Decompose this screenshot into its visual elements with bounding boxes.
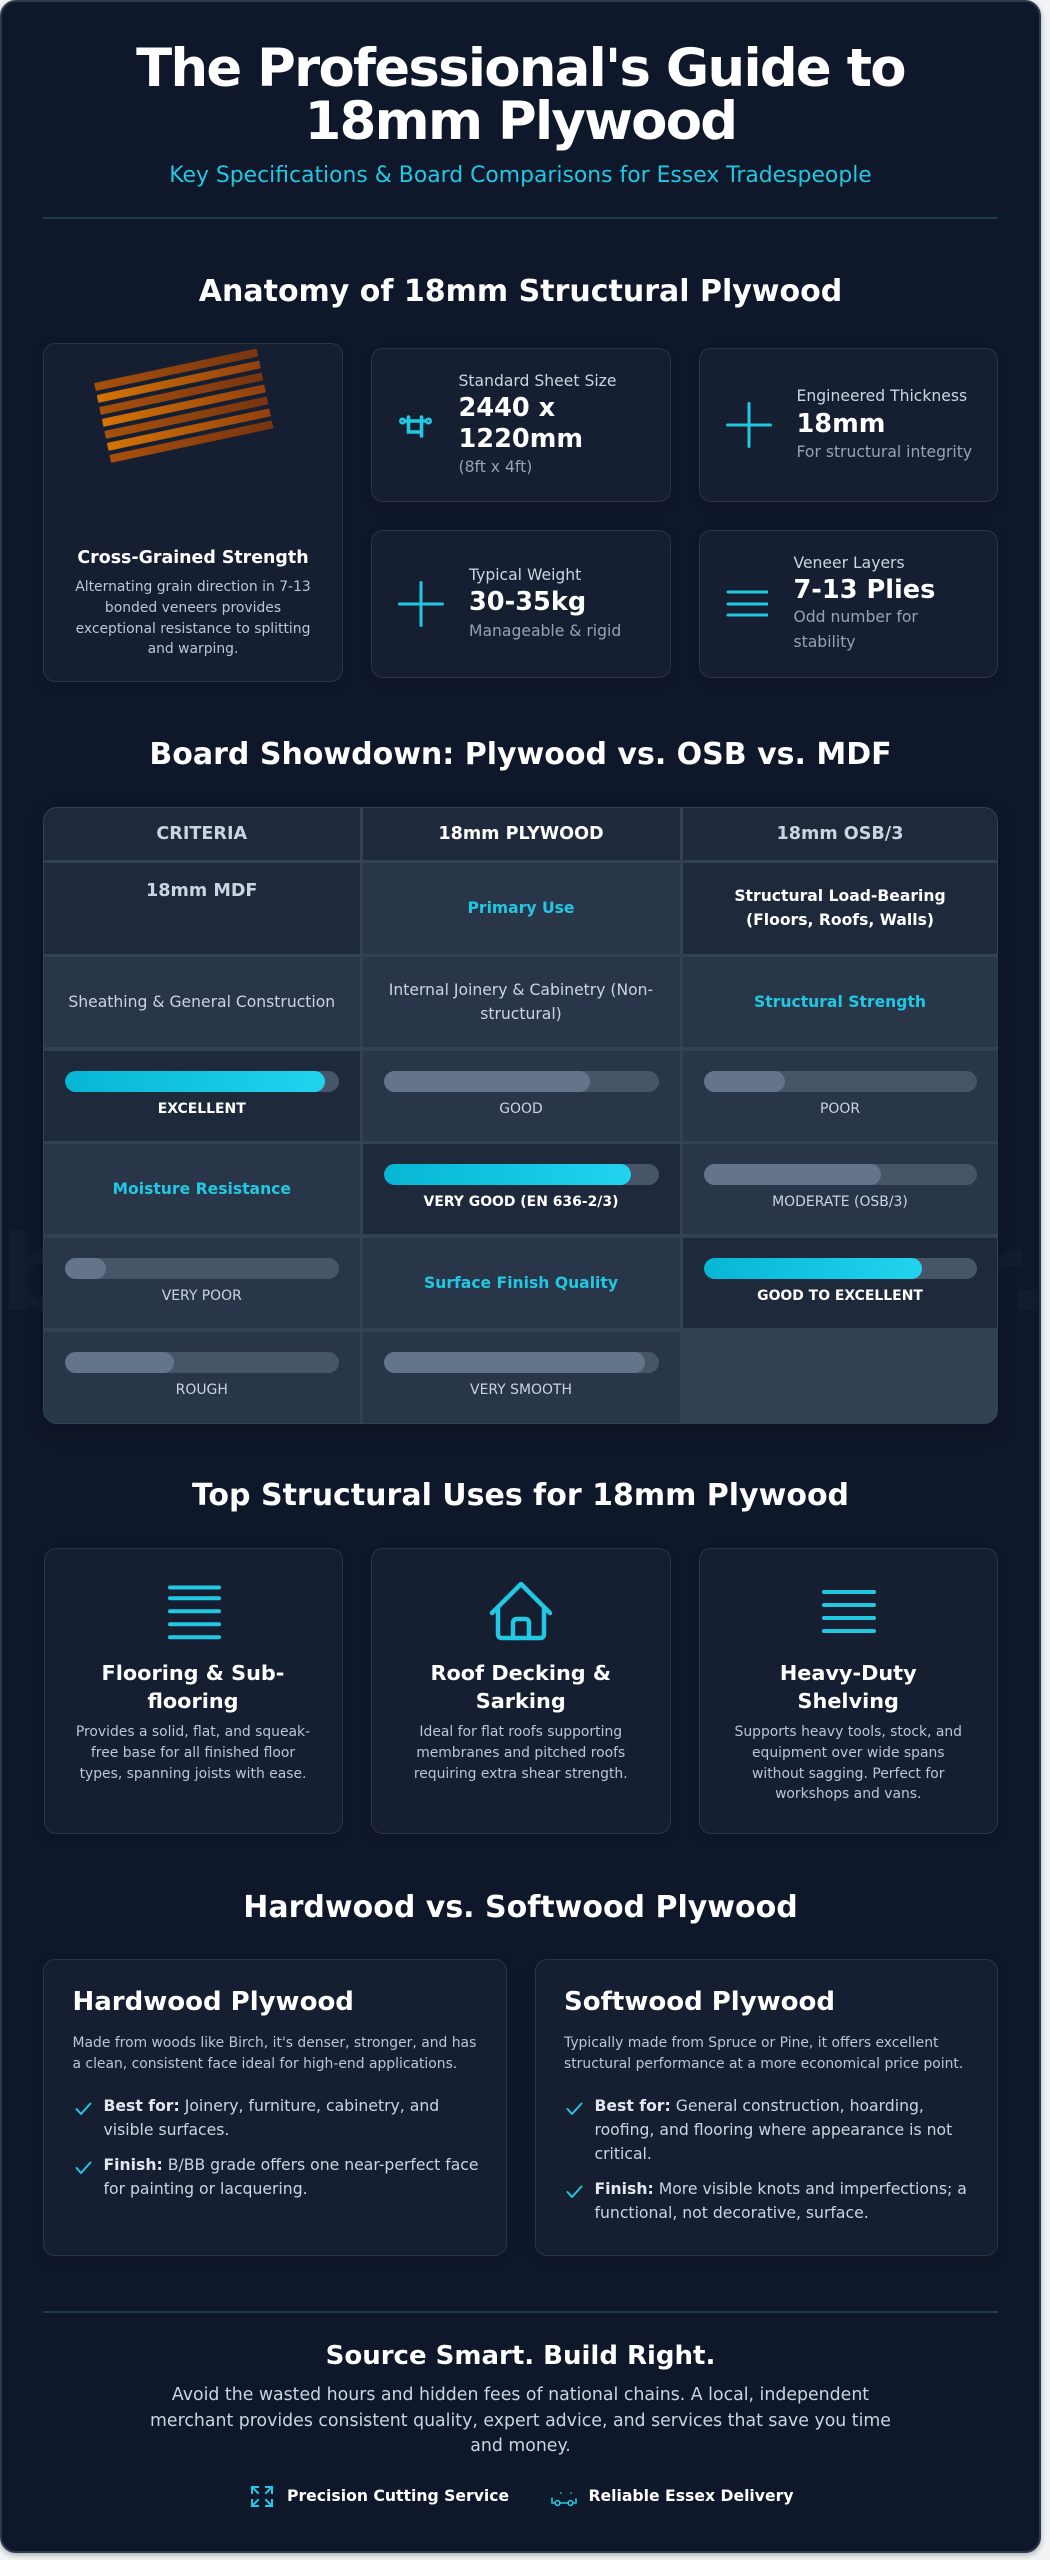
icon: house <box>490 1582 552 1640</box>
card heading <box>430 1660 611 1712</box>
row 4 cell: very good <box>362 1144 680 1234</box>
label: Veneer Layers <box>794 554 905 572</box>
row 2 cell: structural strength: Structural Strength <box>754 992 926 1010</box>
value: 1220mm <box>458 424 583 454</box>
heading: uses: Top Structural Uses for 18mm Plywood <box>192 1478 849 1512</box>
row 2 cell: joinery: structural) <box>480 1004 562 1022</box>
card heading: Sarking <box>476 1688 566 1712</box>
bullet: best for: Best for: Joinery, furniture, cabinetry, and <box>104 2096 439 2115</box>
heading: hardwood vs softwood: Hardwood vs. Softwood Plywood <box>243 1890 798 1924</box>
panel heading: Cross-Grained Strength <box>77 548 309 568</box>
icon: plus <box>726 402 772 448</box>
table header: osb: 18mm OSB/3 <box>776 824 903 844</box>
value: 18mm <box>796 409 885 439</box>
card description: Supports heavy tools, stock, and <box>734 1724 962 1740</box>
bullet: finish: functional, not decorative, surface. <box>594 2203 869 2222</box>
row 3 cell: good <box>362 1050 680 1140</box>
row 4 cell: moderate: MODERATE (OSB/3) <box>772 1194 908 1210</box>
icon: shelves <box>822 1590 876 1633</box>
row 5 cell: surface finish <box>362 1238 680 1328</box>
row 4 cell: moderate <box>682 1144 998 1234</box>
title <box>136 38 905 152</box>
label: Standard Sheet Size <box>458 372 616 390</box>
row 1 cell: structural: Structural Load-Bearing <box>734 886 946 904</box>
card: veneer layers <box>698 530 998 678</box>
row 2 cell: joinery <box>362 956 680 1047</box>
value: 30-35kg <box>469 587 586 617</box>
background watermark text: b <box>0 1212 76 1335</box>
value: 7-13 Plies <box>794 574 935 604</box>
footer heading: Source Smart. Build Right. <box>326 2341 715 2371</box>
footer item: delivery: Reliable Essex Delivery <box>588 2486 794 2504</box>
comparison table <box>43 806 998 1424</box>
row 3 cell: poor: POOR <box>820 1100 860 1116</box>
row 2 cell: sheathing <box>44 956 360 1047</box>
row 1 cell: structural <box>682 862 998 954</box>
card: sheet size <box>370 348 670 502</box>
footer paragraph <box>150 2385 891 2456</box>
row 6 cell: rough <box>44 1332 360 1424</box>
card description <box>734 1724 962 1802</box>
header <box>136 38 905 188</box>
card: shelving <box>698 1548 998 1834</box>
card description: Provides a solid, flat, and squeak- <box>76 1724 310 1740</box>
card heading <box>780 1660 917 1712</box>
row 2 cell: joinery: Internal Joinery & Cabinetry (Non- <box>389 980 653 998</box>
card description: types, spanning joists with ease. <box>80 1766 306 1782</box>
row 5 cell: good to excellent <box>682 1238 998 1328</box>
card heading: Heavy-Duty <box>780 1660 917 1684</box>
row 3 cell: good: GOOD <box>499 1100 543 1116</box>
icon: truck <box>551 2492 577 2506</box>
panel description: structural performance at a more economical price point. <box>564 2056 963 2072</box>
footer item: cutting: Precision Cutting Service <box>287 2486 509 2504</box>
card heading <box>102 1660 284 1712</box>
card heading: Flooring & Sub- <box>102 1660 284 1684</box>
card description <box>414 1724 628 1782</box>
card description: requiring extra shear strength. <box>414 1766 628 1782</box>
value <box>458 392 583 454</box>
card description <box>76 1724 310 1782</box>
panel: softwood <box>534 1959 998 2256</box>
card heading: flooring <box>147 1688 239 1712</box>
row 6 cell: very smooth: VERY SMOOTH <box>470 1382 572 1398</box>
card: weight <box>370 530 670 678</box>
row 6 cell: rough: ROUGH <box>176 1382 228 1398</box>
row 5 cell: very poor: VERY POOR <box>162 1288 242 1304</box>
footer paragraph: merchant provides consistent quality, expert advice, and services that save you time <box>150 2410 891 2430</box>
panel: cross-grained strength <box>43 343 343 682</box>
bullet: finish <box>76 2155 479 2198</box>
heading: showdown: Board Showdown: Plywood vs. OSB vs. MDF <box>149 736 892 772</box>
row 5 cell: very poor <box>44 1238 360 1328</box>
row 3 cell: excellent <box>44 1050 360 1140</box>
row 5 cell: good to excellent: GOOD TO EXCELLENT <box>757 1288 923 1304</box>
title: 18mm Plywood <box>305 90 736 152</box>
bullet: finish: for painting or lacquering. <box>104 2179 308 2198</box>
row 4 cell: moisture: Moisture Resistance <box>112 1180 291 1198</box>
row 2 cell: sheathing: Sheathing & General Construction <box>68 992 335 1010</box>
label: Typical Weight <box>469 566 581 584</box>
bullet: best for: roofing, and flooring where appearance is not <box>594 2120 952 2139</box>
bullet: best for: Best for: General construction, hoarding, <box>594 2096 924 2115</box>
bullet: finish: Finish: B/BB grade offers one near-perfect face <box>104 2155 479 2174</box>
value: 2440 x <box>458 392 555 422</box>
table header: criteria <box>44 808 360 860</box>
footer paragraph: Avoid the wasted hours and hidden fees of national chains. A local, independent <box>172 2385 869 2405</box>
panel description: exceptional resistance to splitting <box>76 621 310 637</box>
row 3 cell: excellent: EXCELLENT <box>158 1100 246 1116</box>
row 1 cell: mdf: 18mm MDF <box>146 880 257 900</box>
card description: without sagging. Perfect for <box>752 1766 944 1782</box>
panel description: Typically made from Spruce or Pine, it offers excellent <box>564 2035 938 2051</box>
label: Engineered Thickness <box>796 387 967 405</box>
card heading: Roof Decking & <box>430 1660 611 1684</box>
table header: plywood <box>362 808 680 860</box>
panel description: a clean, consistent face ideal for high-end applications. <box>72 2056 457 2072</box>
bullet: best for: critical. <box>594 2144 652 2163</box>
row 1 cell: mdf <box>44 862 360 954</box>
icon: clamp <box>399 415 432 438</box>
card description: free base for all finished floor <box>91 1745 295 1761</box>
card description: equipment over wide spans <box>752 1745 945 1761</box>
table header: plywood: 18mm PLYWOOD <box>438 824 604 844</box>
table header: criteria: CRITERIA <box>156 824 247 844</box>
panel description: Alternating grain direction in 7-13 <box>75 579 311 595</box>
icon: plus <box>398 581 444 627</box>
note: Odd number for <box>794 608 918 626</box>
row 2 cell: structural strength <box>682 956 998 1047</box>
panel: hardwood <box>43 1959 507 2256</box>
row 1 cell: structural: (Floors, Roofs, Walls) <box>746 910 934 928</box>
bullet: best for <box>566 2096 952 2163</box>
background watermark text <box>0 1209 1041 1339</box>
card description: workshops and vans. <box>775 1786 921 1802</box>
card description: Ideal for flat roofs supporting <box>419 1724 622 1740</box>
heading: anatomy: Anatomy of 18mm Structural Plywood <box>199 274 842 308</box>
panel heading: Softwood Plywood <box>564 1987 835 2017</box>
note: For structural integrity <box>796 442 972 460</box>
row 1 cell: primary use: Primary Use <box>467 898 575 916</box>
subtitle: Key Specifications & Board Comparisons for Essex Tradespeople <box>169 163 872 188</box>
row 1 cell: primary use <box>362 862 680 954</box>
row 5 cell: surface finish: Surface Finish Quality <box>424 1274 618 1292</box>
card: roof <box>371 1548 670 1834</box>
footer paragraph: and money. <box>470 2436 571 2456</box>
panel description <box>564 2035 963 2072</box>
card: thickness <box>698 348 998 502</box>
note: Manageable & rigid <box>469 622 621 640</box>
bullet: finish <box>566 2179 967 2222</box>
row 3 cell: poor <box>682 1050 998 1140</box>
card description: membranes and pitched roofs <box>416 1745 625 1761</box>
icon: floor boards <box>168 1586 221 1640</box>
row 6 cell: very smooth <box>362 1332 680 1424</box>
bullet: best for: visible surfaces. <box>104 2120 229 2139</box>
row 4 cell: very good: VERY GOOD (EN 636-2/3) <box>424 1194 618 1210</box>
panel description: and warping. <box>148 641 238 657</box>
icon: expand arrows <box>250 2486 274 2508</box>
panel heading: Hardwood Plywood <box>72 1987 354 2017</box>
panel description <box>72 2035 476 2072</box>
bullet: best for <box>76 2096 439 2139</box>
card: flooring <box>44 1548 342 1834</box>
card heading: Shelving <box>798 1688 899 1712</box>
icon: layers <box>726 590 768 616</box>
card: veneer layers: stability <box>794 633 856 651</box>
table header: osb <box>682 808 998 860</box>
note: (8ft x 4ft) <box>458 458 532 476</box>
icon: plywood layers <box>94 348 274 463</box>
bullet: finish: Finish: More visible knots and imperfections; a <box>594 2179 967 2198</box>
row 4 cell: moisture <box>44 1144 360 1234</box>
panel description: Made from woods like Birch, it's denser, stronger, and has <box>72 2035 476 2051</box>
panel description: bonded veneers provides <box>105 600 281 616</box>
title: The Professional's Guide to <box>136 38 905 99</box>
panel description <box>75 579 311 657</box>
